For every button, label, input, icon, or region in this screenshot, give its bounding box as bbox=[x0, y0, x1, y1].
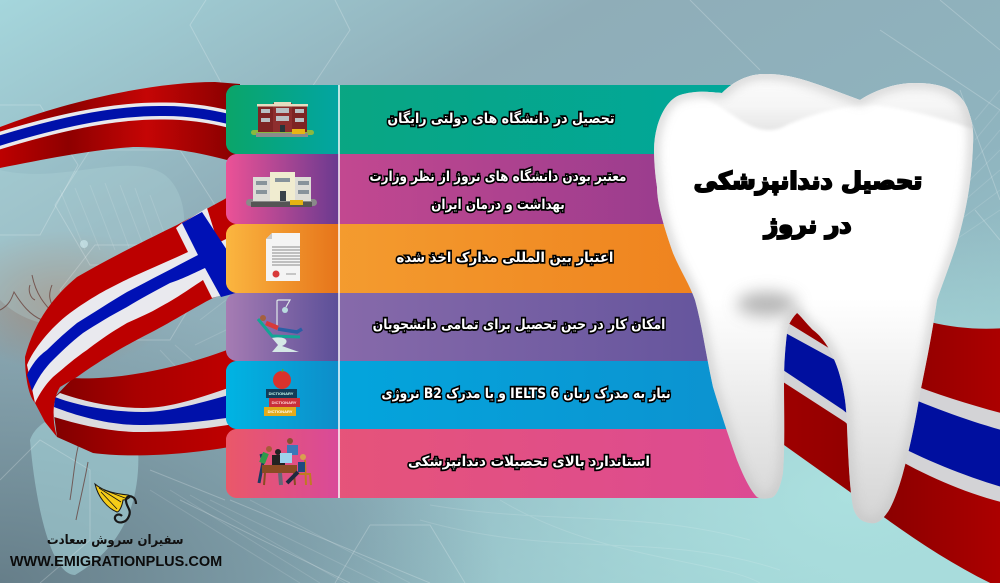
row 3 text: اعتبار بین المللی مدارک اخذ شده bbox=[396, 250, 613, 266]
row 2: accredited by Iranian ministry bbox=[226, 154, 766, 224]
title: تحصیل دندانپزشکی bbox=[694, 167, 922, 195]
lower band segment bbox=[52, 345, 240, 455]
icon cell: team around table bbox=[226, 429, 339, 498]
text cell bbox=[339, 429, 766, 498]
text cell bbox=[339, 293, 766, 361]
row 2 text bbox=[368, 166, 627, 214]
logo text: website: WWW.EMIGRATIONPLUS.COM bbox=[10, 554, 222, 570]
row 4: work while studying bbox=[226, 293, 766, 361]
icon cell: brick university bbox=[226, 85, 339, 154]
edge shading bbox=[654, 74, 973, 523]
furcation shadow bbox=[737, 292, 797, 316]
text cell bbox=[339, 224, 766, 293]
row 6 text: استاندارد بالای تحصیلات دندانپزشکی bbox=[408, 454, 650, 470]
icon cell: document with seal bbox=[226, 224, 339, 293]
title bbox=[694, 167, 922, 240]
row 2 text: بهداشت و درمان ایران bbox=[431, 197, 565, 213]
text cell bbox=[339, 361, 766, 429]
row 5: language requirement bbox=[226, 361, 766, 429]
icon cell: dictionaries and apple: DICTIONARY bbox=[269, 391, 294, 396]
logo icon: winged swan bbox=[94, 482, 138, 524]
back cusps above the ridge bbox=[698, 74, 973, 130]
text cell bbox=[339, 154, 766, 224]
text cell bbox=[339, 85, 766, 154]
logo text: Persian name: سفیران سروش سعادت bbox=[47, 533, 183, 548]
row 3: internationally recognised degrees bbox=[226, 224, 766, 293]
icon cell: dictionaries and apple: DICTIONARY bbox=[272, 400, 297, 405]
row 1 text: تحصیل در دانشگاه های دولتی رایگان bbox=[387, 111, 615, 127]
tooth illustration bbox=[654, 74, 974, 524]
icon cell: dental chair bbox=[226, 293, 339, 361]
row 5 text: نیاز به مدرک زبان IELTS 6 و یا مدرک B2 نروژی bbox=[381, 386, 671, 402]
front band segment with cross bbox=[25, 190, 240, 437]
row 1: free public universities bbox=[226, 85, 766, 154]
row 2 text: معتبر بودن دانشگاه های نروژ از نظر وزارت bbox=[370, 169, 626, 185]
title: در نروژ bbox=[764, 211, 852, 239]
row 4 text: امکان کار در حین تحصیل برای تمامی دانشجویان bbox=[373, 317, 665, 333]
icon cell: white university bbox=[226, 154, 339, 224]
row 6: high standard of education bbox=[226, 429, 766, 498]
icon cell: dictionaries and apple bbox=[226, 361, 339, 429]
icon cell: dictionaries and apple: DICTIONARY bbox=[268, 409, 293, 414]
